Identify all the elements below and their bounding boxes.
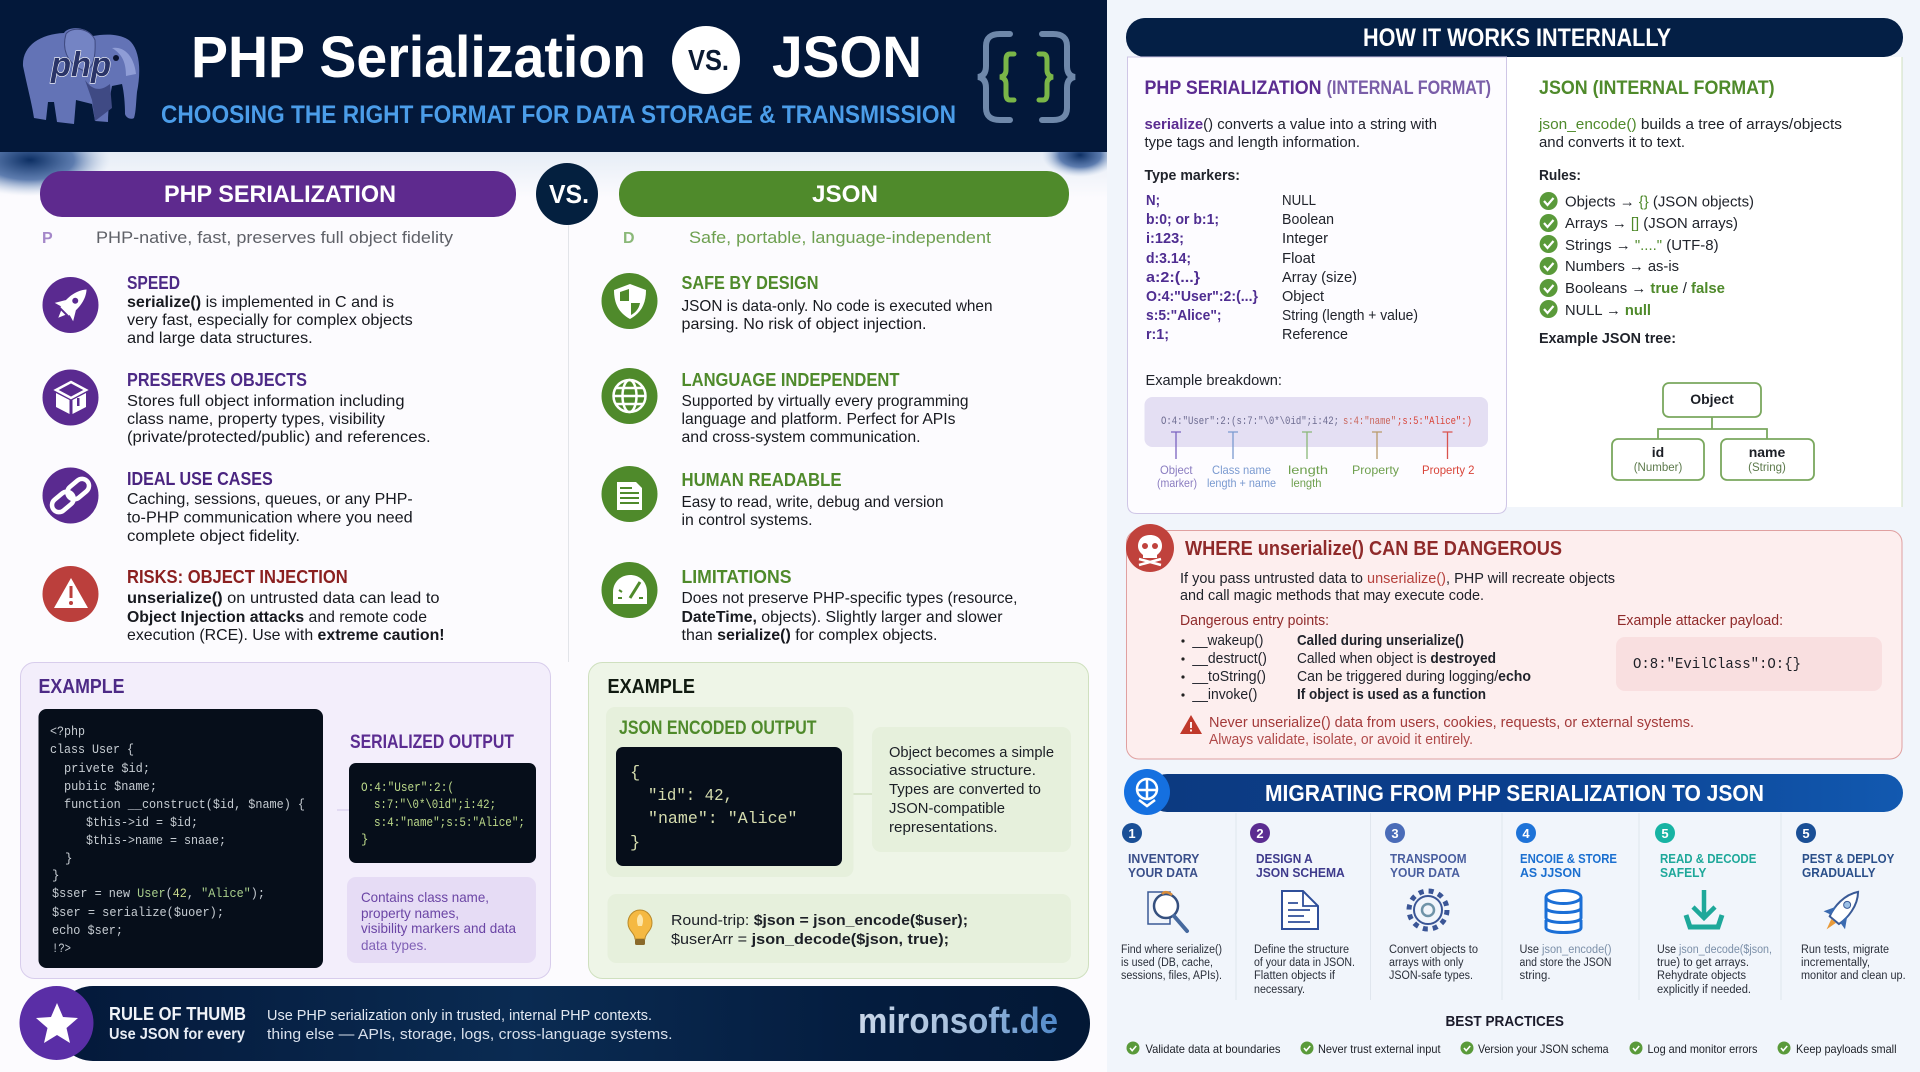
icon: document [1282,891,1318,929]
step 3: transform: Convert objects to [1389,944,1478,956]
ideal use cases item: Caching, sessions, queues, or any PHP- [127,491,413,508]
dangerous entry points: Can be triggered during logging/echo [1297,668,1531,685]
code block: serialized output [349,763,536,863]
step 2: design schema [1250,823,1355,996]
type markers table: N; [1146,192,1160,209]
speed item: SPEED [127,273,180,293]
json tagline: Safe, portable, language-independent [689,228,991,247]
language independent item: and cross-system communication. [682,429,920,446]
heading: JSON (INTERNAL FORMAT) [1539,78,1775,99]
php tagline: P [42,230,53,247]
code block: php class: function __construct($id, $name) { [64,798,305,812]
step 1: inventory: 1 [1128,826,1136,841]
safe by design item [602,273,992,333]
human readable item [602,466,944,529]
speed item: very fast, especially for complex objects [127,312,413,329]
panel: php example [20,662,550,978]
badge: vs: VS. [688,45,729,77]
example json tree: Object [1690,391,1734,407]
preserves objects item: (private/protected/public) and references. [127,429,431,446]
step 6: test and deploy [1796,823,1906,982]
type markers table: Type markers: [1144,167,1240,184]
note: object becomes [872,727,1071,852]
step 3: transform: 3 [1391,826,1399,841]
example json tree: id [1652,444,1664,460]
code block: php class: $ser = serialize($uoer); [52,906,224,920]
risks item: Object Injection attacks and remote code [127,609,427,626]
code block: php class: <?php [50,725,85,739]
type markers table: a:2:(...} [1146,269,1200,286]
limitations item: than serialize() for complex objects. [682,627,938,644]
code block: php class [38,709,323,968]
step 5: read and decode: true) to get arrays. [1657,957,1749,969]
card: json encoded output: { [630,764,640,783]
labels: length + name [1207,476,1276,490]
step 2: design schema: JSON SCHEMA [1256,865,1345,880]
step 1: inventory: is used (DB, cache, [1121,957,1213,969]
heading: WHERE unserialize() CAN BE DANGEROUS [1185,538,1562,560]
code block: php class: privete $id; [64,762,150,776]
step 4: encode and store [1516,823,1617,982]
step 6: test and deploy: Run tests, migrate [1801,944,1889,956]
code block: php class: $this->name = snaae; [86,834,226,848]
example json tree: name [1749,444,1785,460]
how it works heading [1126,18,1903,57]
json pill: JSON [812,181,878,208]
intro text: If you pass untrusted data to unserialize(), PHP will recreate objects [1180,570,1615,587]
risks item: unserialize() on untrusted data can lead to [127,590,440,607]
warning note [1180,714,1694,748]
step dividers [1236,813,1781,1000]
limitations item: Does not preserve PHP-specific types (resource, [682,590,1018,607]
labels: Property [1352,463,1399,477]
step 3: transform [1385,823,1478,982]
icon: download [1686,890,1722,927]
icon: database [1546,890,1581,932]
type markers table: b:0; or b:1; [1146,211,1219,228]
dangerous entry points: If object is used as a function [1297,686,1486,703]
rule of thumb bar: Use JSON for every [109,1026,245,1043]
step 5: read and decode: Use json_decode($json, [1657,944,1772,956]
language independent item: language and platform. Perfect for APIs [682,411,956,428]
dangerous entry points: __wakeup() [1191,632,1263,649]
step 5: read and decode: SAFELY [1660,865,1707,880]
step 4: encode and store: Use json_encode() [1520,944,1612,956]
note: object becomes: representations. [889,819,998,836]
best practices: Validate data at boundaries [1146,1042,1280,1056]
step 5: read and decode: Rehydrate objects [1657,970,1746,982]
code block: php class: } [65,852,73,866]
safe by design item: SAFE BY DESIGN [682,273,818,293]
labels: Class name [1212,463,1271,477]
risks item [42,566,445,644]
heading: example: EXAMPLE [608,676,695,698]
icon: php elephant [23,28,139,124]
note: contains: property names, [361,905,459,921]
intro text: json_encode() builds a tree of arrays/objects [1538,116,1842,133]
rule of thumb bar: Use PHP serialization only in trusted, internal PHP contexts. [267,1007,652,1024]
step 5: read and decode: READ & DECODE [1660,851,1757,866]
icon: star [20,986,94,1060]
php serialization pill: PHP SERIALIZATION [164,181,396,208]
ideal use cases item: to-PHP communication where you need [127,510,413,526]
example json tree: Example JSON tree: [1539,330,1676,347]
step 1: inventory: Find where serialize() [1121,944,1222,956]
step 2: design schema: Flatten objects if [1254,970,1336,982]
speed item [42,273,413,347]
safe by design item: JSON is data-only. No code is executed when [682,298,992,315]
rules list: Objects → {} (JSON objects) [1565,194,1754,210]
preserves objects item [42,370,431,446]
step 6: test and deploy: monitor and clean up. [1801,970,1906,982]
json tagline: D [623,230,635,247]
note: contains: visibility markers and data [361,920,516,936]
title: JSON: JSON [772,25,922,90]
safe by design item: parsing. No risk of object injection. [682,316,926,333]
subtitle: CHOOSING THE RIGHT FORMAT FOR DATA STORAGE & TRANSMISSION [161,101,956,129]
rule of thumb bar: thing else — APIs, storage, logs, cross-language systems. [267,1026,672,1043]
labels: length [1291,476,1322,490]
card: json encoded output [606,707,854,877]
type markers table: Reference [1282,326,1348,343]
type markers table: NULL [1282,192,1316,209]
best practices: BEST PRACTICES [1446,1013,1564,1030]
step 5: read and decode: explicitly if needed. [1657,984,1751,996]
code block: php class: } [52,869,60,883]
rules list: Strings → "...." (UTF-8) [1565,237,1719,254]
warning note: Always validate, isolate, or avoid it entirely. [1209,731,1473,748]
code block: php class: $sser = new User(42, "Alice"); [52,887,265,901]
preserves objects item: class name, property types, visibility [127,411,385,428]
rules list: NULL → null [1565,302,1651,319]
risks item: RISKS: OBJECT INJECTION [127,567,348,587]
type markers table: O:4:"User":2:(...} [1146,288,1258,305]
step 3: transform: YOUR DATA [1390,865,1461,880]
type markers table [1144,167,1418,343]
heading [1144,78,1491,99]
round trip tip [608,894,1071,963]
code block: php class: pubiic $name; [64,780,157,794]
type markers table: Array (size) [1282,269,1357,286]
best practices: Keep payloads small [1796,1042,1896,1056]
step 2: design schema: Define the structure [1254,944,1349,956]
icon: rocket [1816,883,1869,938]
step 5: read and decode [1655,823,1772,996]
best practices: Never trust external input [1318,1042,1441,1056]
code block: php class: class User { [50,743,134,757]
type markers table: Boolean [1282,211,1334,228]
type markers table: d:3.14; [1146,250,1191,267]
heading: (INTERNAL FORMAT) [1327,78,1491,99]
step 4: encode and store: 4 [1522,826,1530,841]
arrows [1171,432,1452,459]
code block: serialized output: } [361,833,369,847]
icon: php elephant: php [50,46,111,84]
type markers table: Float [1282,250,1316,267]
speed item: and large data structures. [127,330,313,347]
labels [1157,463,1475,490]
php tagline: PHP-native, fast, preserves full object fidelity [96,228,454,247]
panel: unserialize danger [1126,524,1902,759]
connector [854,793,872,795]
json pill [619,171,1069,217]
speed item: serialize() is implemented in C and is [127,294,394,311]
best practices: Log and monitor errors [1648,1042,1758,1056]
step 6: test and deploy: GRADUALLY [1802,865,1876,880]
dangerous entry points: __invoke() [1191,686,1257,703]
dangerous entry points: __destruct() [1191,650,1267,667]
heading: PHP SERIALIZATION [1144,78,1322,99]
limitations item [602,562,1018,644]
labels: Object [1160,463,1193,477]
language independent item [602,368,968,446]
step 1: inventory [1121,823,1222,982]
human readable item: Easy to read, write, debug and version [682,494,944,511]
intro text [1144,116,1437,151]
panel: json benefits [602,273,1018,644]
example breakdown: ;s:5:"Alice":) [1397,416,1472,428]
panel: json internal format [1507,57,1902,507]
round trip tip: Round-trip: $json = json_encode($user); [671,912,968,929]
connector [337,809,349,811]
code block: serialized output: s:7:"\0*\0id";i:42; [374,798,496,812]
step 4: encode and store: and store the JSON [1520,957,1612,969]
example json tree: (Number) [1634,462,1682,474]
step 2: design schema: of your data in JSON. [1254,957,1355,969]
ideal use cases item: IDEAL USE CASES [127,469,273,489]
step 4: encode and store: string. [1520,970,1550,982]
attacker payload [1616,612,1882,691]
code block: serialized output: s:4:"name";s:5:"Alice"; [374,816,525,830]
step 3: transform: arrays with only [1389,957,1464,969]
best practices [1126,1013,1896,1056]
note: contains: data types. [361,937,427,953]
title: PHP Serialization: PHP Serialization [191,25,646,90]
step 4: encode and store: AS JJSON [1520,865,1581,880]
example json tree: (String) [1748,462,1786,474]
step 3: transform: JSON-safe types. [1389,970,1473,982]
type markers table: String (length + value) [1282,307,1418,324]
rules list: Arrays → [] (JSON arrays) [1565,215,1738,232]
note: object becomes: Object becomes a simple [889,744,1054,761]
icon: json braces [978,34,1075,120]
step 3: transform: TRANSPOOM [1390,851,1466,866]
language independent item: Supported by virtually every programming [682,393,968,410]
icon: gear [1409,891,1447,929]
step 4: encode and store: ENCOIE & STORE [1520,851,1617,866]
brand: mironsoft.de: mironsoft.de [858,1000,1058,1041]
step 6: test and deploy: 5 [1802,826,1810,841]
attacker payload: O:8:"EvilClass":O:{} [1633,656,1801,673]
labels: (marker) [1157,476,1197,490]
dangerous entry points [1180,612,1531,703]
preserves objects item: PRESERVES OBJECTS [127,370,307,390]
note: object becomes: associative structure. [889,762,1036,779]
ideal use cases item: complete object fidelity. [127,528,300,545]
migration heading [1124,769,1903,815]
rule of thumb bar [20,986,1090,1061]
panel: json example [588,662,1088,978]
step 2: design schema: DESIGN A [1256,851,1313,866]
step 6: test and deploy: PEST & DEPLOY [1802,851,1895,866]
intro text: type tags and length information. [1144,134,1360,151]
how it works heading: HOW IT WORKS INTERNALLY [1363,24,1671,52]
panel: php internal format [1128,57,1506,514]
icon: light bulb [628,910,652,945]
round trip tip: $userArr = json_decode($json, true); [671,931,949,948]
example breakdown: Example breakdown: [1146,372,1282,389]
code block: serialized output: O:4:"User":2:( [361,781,454,795]
type markers table: i:123; [1146,230,1184,247]
note: contains [347,877,536,963]
step 1: inventory: YOUR DATA [1128,865,1199,880]
human readable item: in control systems. [682,512,812,529]
limitations item: DateTime, objects). Slightly larger and slower [682,609,1003,626]
rules list [1539,167,1754,319]
note: object becomes: Types are converted to [889,781,1041,798]
card: json encoded output: JSON ENCODED OUTPUT [619,718,817,739]
warning note: Never unserialize() data from users, cookies, requests, or external systems. [1209,714,1694,731]
type markers table: Object [1282,288,1325,305]
intro text: serialize() converts a value into a string with [1144,116,1437,133]
type markers table: s:5:"Alice"; [1146,307,1222,324]
dangerous entry points: Dangerous entry points: [1180,612,1329,629]
icon: migration badge [1124,769,1170,815]
human readable item: HUMAN READABLE [682,470,842,490]
risks item: execution (RCE). Use with extreme caution! [127,627,445,644]
php serialization pill [40,171,516,217]
step 6: test and deploy: incrementally, [1801,957,1870,969]
dangerous entry points: Called when object is destroyed [1297,650,1496,667]
example breakdown [1144,372,1488,490]
intro text: and converts it to text. [1539,134,1685,151]
labels: length [1288,463,1328,477]
card: json encoded output: } [630,834,640,853]
preserves objects item: Stores full object information including [127,393,404,410]
intro text [1180,570,1615,604]
language independent item: LANGUAGE INDEPENDENT [682,370,900,390]
migration heading: MIGRATING FROM PHP SERIALIZATION TO JSON [1265,780,1764,806]
vs circle: VS. [549,179,589,209]
step 1: inventory: sessions, files, APIs). [1121,970,1222,982]
rules list: Booleans → true / false [1565,280,1725,297]
heading: example: EXAMPLE [38,676,124,698]
attacker payload: Example attacker payload: [1617,612,1783,629]
dangerous entry points: __toString() [1191,668,1266,685]
example json tree [1539,330,1814,480]
ideal use cases item [42,468,413,545]
card: json encoded output: "name": "Alice" [648,810,798,829]
icon: magnifier [1148,892,1187,931]
labels: Property 2 [1422,463,1475,477]
vs circle [536,163,598,225]
heading: serialized output: SERIALIZED OUTPUT [350,732,514,753]
note: object becomes: JSON-compatible [889,800,1005,817]
example breakdown: O:4:"User":2:(s:7:"\0*\0id";i:42; [1161,416,1339,428]
dangerous entry points: Called during unserialize() [1297,632,1464,649]
intro text [1538,116,1842,151]
note: contains: Contains class name, [361,889,489,905]
intro text: and call magic methods that may execute code. [1180,587,1484,604]
card: json encoded output: "id": 42, [648,787,733,806]
code block: php class: $this->id = $id; [86,816,198,830]
header banner [0,0,1107,152]
type markers table: r:1; [1146,326,1169,343]
step 1: inventory: INVENTORY [1128,851,1200,866]
type markers table: Integer [1282,230,1328,247]
step 5: read and decode: 5 [1661,826,1669,841]
rules list: Rules: [1539,167,1581,184]
code block: php class: !?> [52,942,71,956]
rule of thumb bar: RULE OF THUMB [109,1004,246,1024]
rules list: Numbers → as-is [1565,258,1679,275]
step 2: design schema: 2 [1256,826,1264,841]
code block: php class: echo $ser; [52,924,123,938]
panel: php benefits [42,273,445,644]
example breakdown: s:4:"name" [1343,416,1396,428]
best practices: Version your JSON schema [1478,1042,1609,1056]
icon: skull [1126,524,1174,572]
step 2: design schema: necessary. [1254,984,1305,996]
badge: vs [672,26,740,94]
limitations item: LIMITATIONS [682,567,792,587]
